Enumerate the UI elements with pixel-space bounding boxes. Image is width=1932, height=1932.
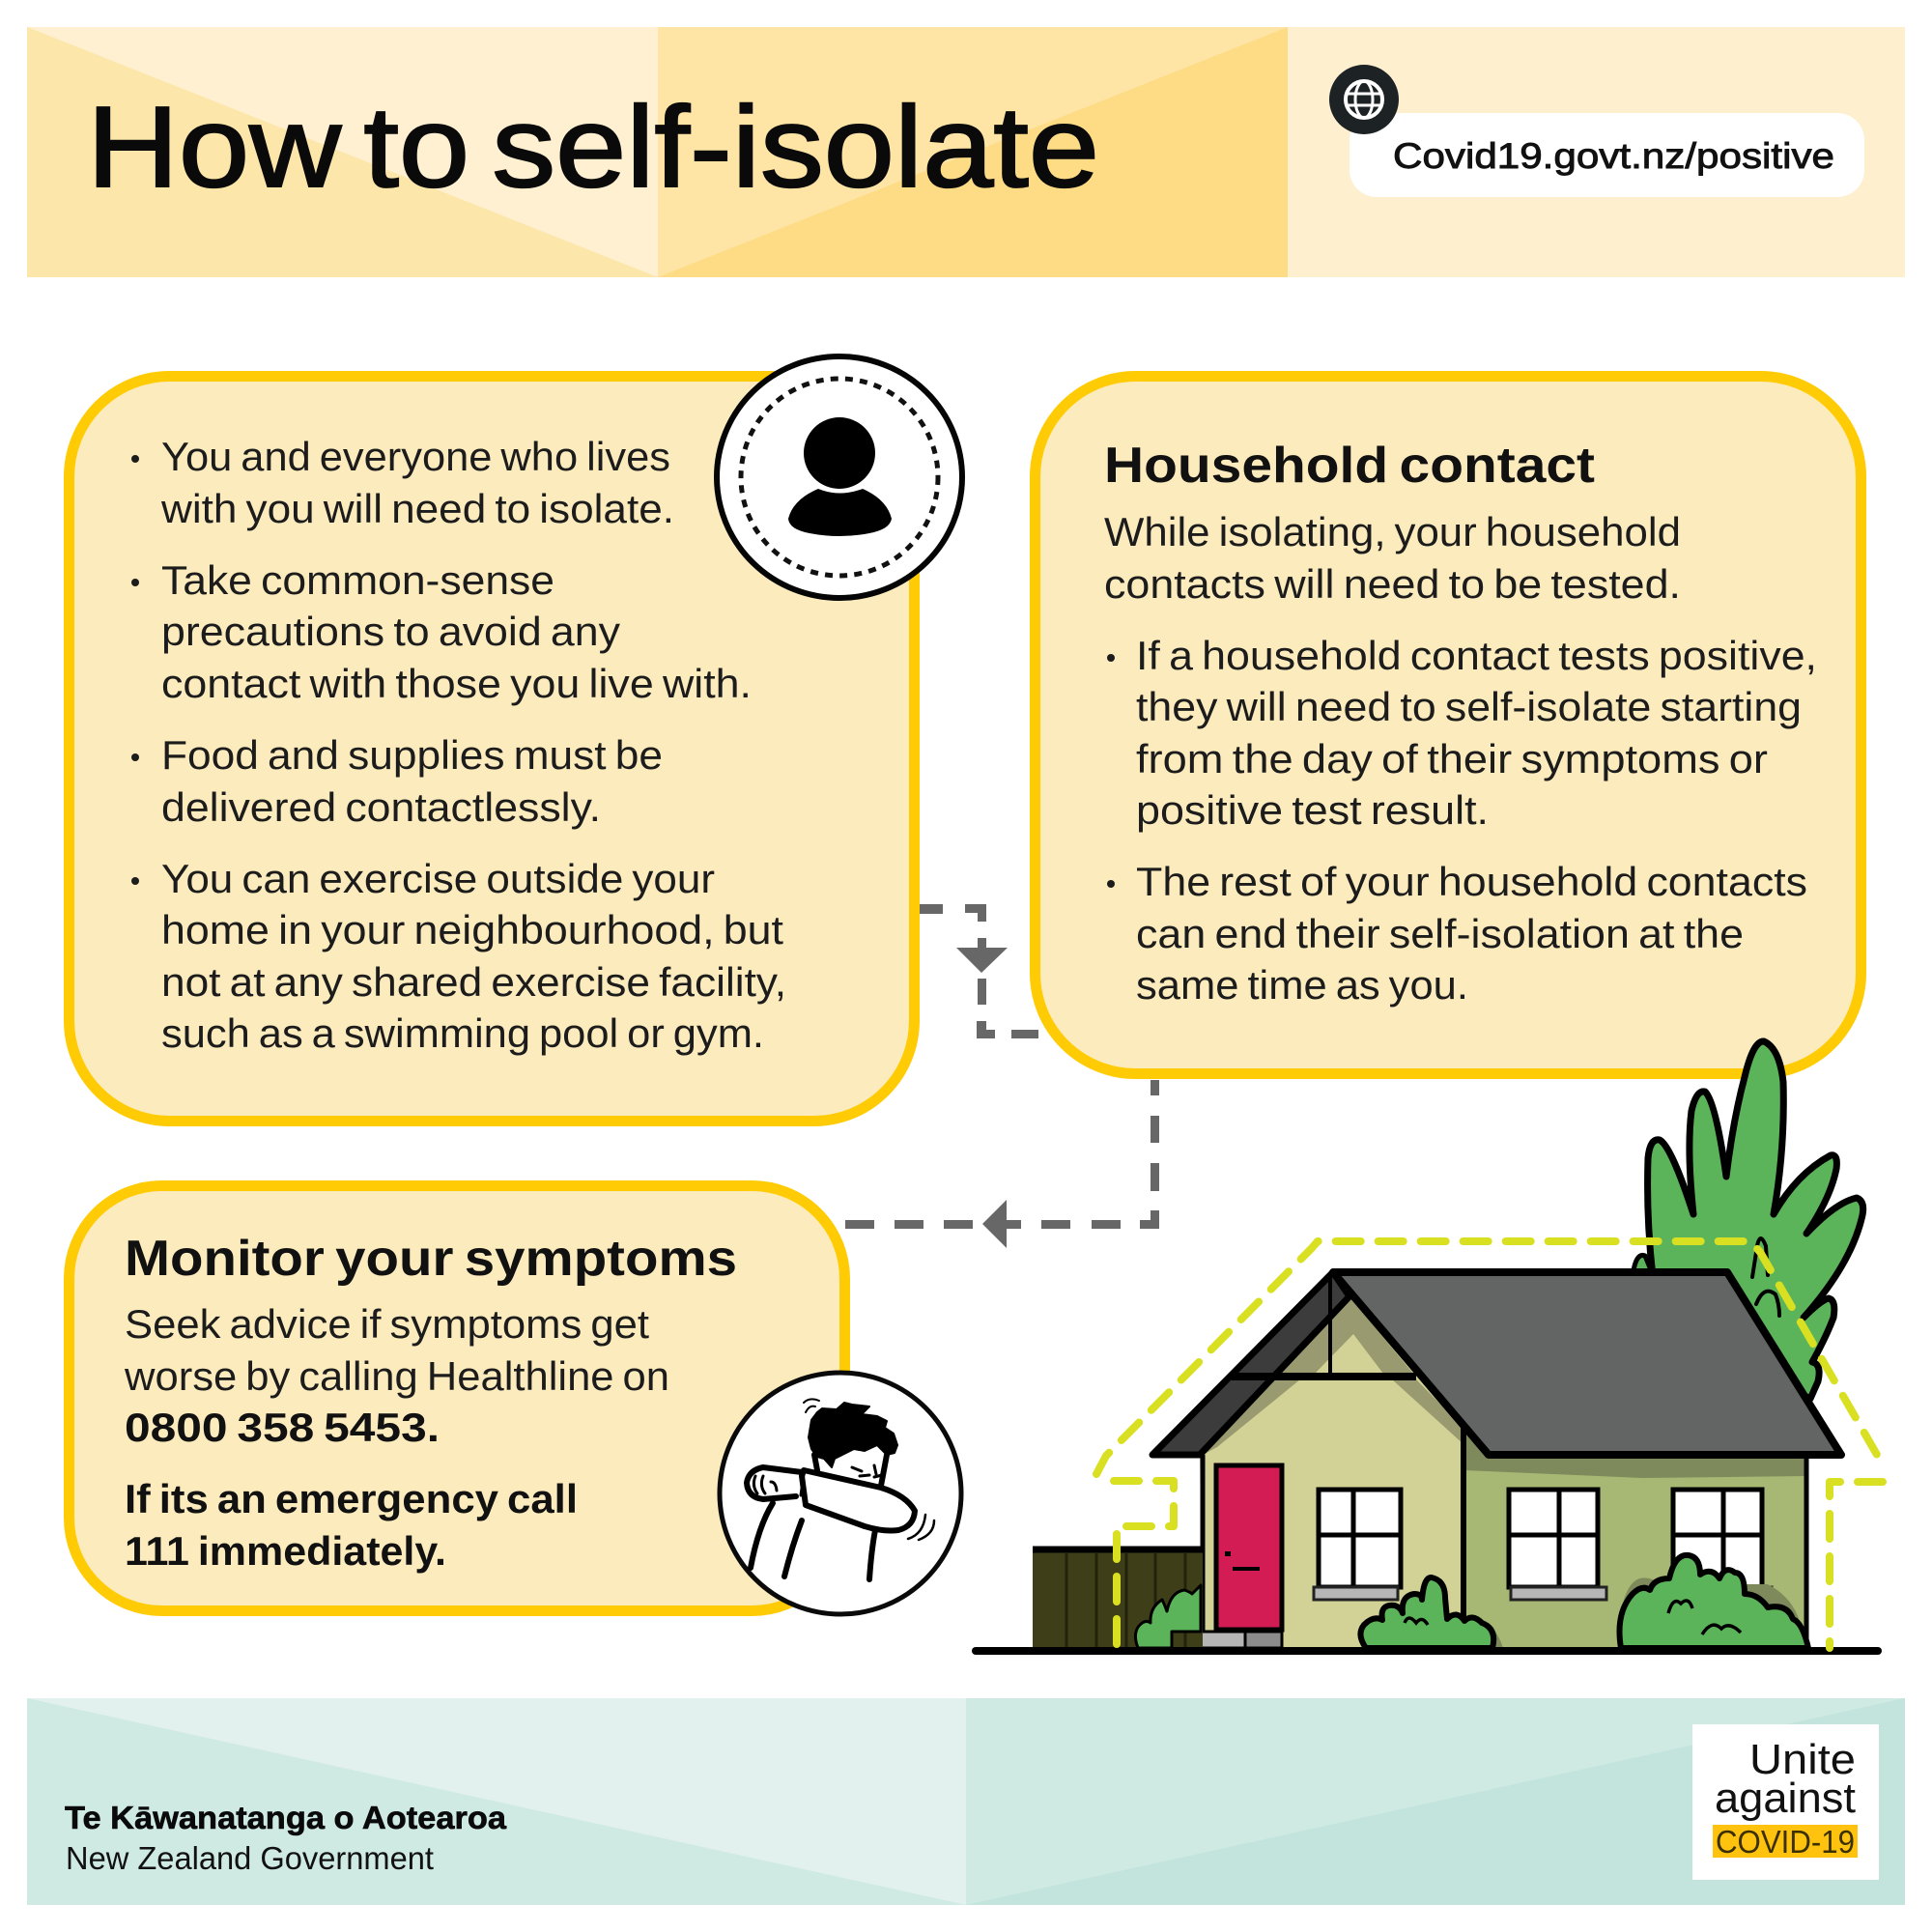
bullet list: such as a swimming pool or gym. — [161, 1010, 764, 1056]
icon: globe — [1329, 65, 1399, 134]
url pill — [1350, 113, 1864, 197]
roof gable band — [1152, 1272, 1350, 1455]
household contact text: from the day of their symptoms or — [1136, 736, 1768, 781]
window 1 — [1314, 1490, 1401, 1600]
unite against covid-19 logo: Unite — [1749, 1736, 1856, 1783]
bullet list: delivered contactlessly. — [161, 784, 601, 830]
unite against covid-19 logo — [1692, 1724, 1879, 1880]
roof: main — [1333, 1272, 1841, 1455]
icon: person coughing into elbow — [720, 1373, 961, 1614]
bullet list: Food and supplies must be — [161, 732, 663, 778]
new zealand government logo text: Te Kāwanatanga o Aotearoa — [65, 1800, 507, 1835]
household contact text: positive test result. — [1136, 787, 1489, 833]
symptoms text: Seek advice if symptoms get — [125, 1301, 649, 1347]
ground line — [976, 1647, 1878, 1655]
tree — [1633, 1041, 1863, 1399]
url pill: Covid19.govt.nz/positive — [1393, 136, 1834, 176]
heading: household contact: Household contact — [1104, 438, 1595, 494]
panel: self isolation precautions — [70, 377, 914, 1121]
bullet list: not at any shared exercise facility, — [161, 959, 786, 1005]
bush: left — [1135, 1585, 1201, 1648]
household contact text — [1104, 509, 1817, 1008]
footer banner — [27, 1698, 1905, 1905]
shadows behind bushes — [1468, 1577, 1803, 1648]
bush: centre — [1360, 1577, 1493, 1648]
household contact text: If a household contact tests positive, — [1136, 633, 1817, 678]
household contact text: they will need to self-isolate starting — [1136, 684, 1802, 729]
bullet list: precautions to avoid any — [161, 609, 620, 654]
bullet list: Take common-sense — [161, 557, 554, 603]
symptoms text — [124, 1301, 669, 1574]
panel: monitor your symptoms — [70, 1186, 844, 1611]
household contact text: The rest of your household contacts — [1136, 859, 1807, 904]
wall: side — [1463, 1428, 1806, 1648]
bullet list: with you will need to isolate. — [160, 486, 674, 531]
heading: monitor your symptoms: Monitor your symptoms — [125, 1231, 737, 1287]
wall: gable — [1200, 1296, 1463, 1648]
bullet list: You can exercise outside your — [161, 856, 715, 901]
gable shadow — [1203, 1296, 1463, 1455]
bullet list: You and everyone who lives — [161, 434, 670, 479]
illustration: house — [976, 1041, 1884, 1651]
new zealand government logo text: New Zealand Government — [66, 1840, 434, 1876]
yellow dashed household bubble — [1096, 1241, 1884, 1648]
household contact text: can end their self-isolation at the — [1136, 911, 1744, 956]
unite against covid-19 logo: against — [1715, 1775, 1856, 1822]
household contact text: same time as you. — [1136, 962, 1468, 1008]
symptoms text: 0800 358 5453. — [125, 1405, 440, 1450]
header banner — [27, 27, 1905, 277]
house outlines — [1200, 1275, 1806, 1648]
door — [1216, 1465, 1282, 1630]
bullet list — [131, 434, 786, 1056]
household contact text: While isolating, your household — [1104, 509, 1681, 554]
fence — [1033, 1549, 1203, 1648]
door step — [1172, 1632, 1282, 1648]
household contact text: contacts will need to be tested. — [1104, 561, 1681, 607]
bush: left foreground — [1135, 1585, 1201, 1648]
dashed arrow: isolation to household contact — [920, 904, 1038, 1038]
dashed arrow: household contact to monitor symptoms — [845, 1080, 1159, 1248]
bush: right — [1619, 1555, 1808, 1648]
icon: person in circle — [717, 356, 962, 598]
symptoms text: worse by calling Healthline on — [124, 1353, 669, 1399]
unite against covid-19 logo: COVID-19 — [1716, 1824, 1855, 1860]
symptoms text: If its an emergency call — [125, 1476, 578, 1521]
window 3 — [1673, 1490, 1772, 1600]
bullet list: home in your neighbourhood, but — [161, 907, 783, 952]
bullet list: contact with those you live with. — [161, 661, 752, 706]
panel: household contact — [1036, 377, 1861, 1074]
title: How to self-isolate — [87, 83, 1099, 212]
new zealand government logo text — [65, 1800, 507, 1876]
symptoms text: 111 immediately. — [125, 1528, 446, 1574]
window 2 — [1509, 1490, 1606, 1600]
